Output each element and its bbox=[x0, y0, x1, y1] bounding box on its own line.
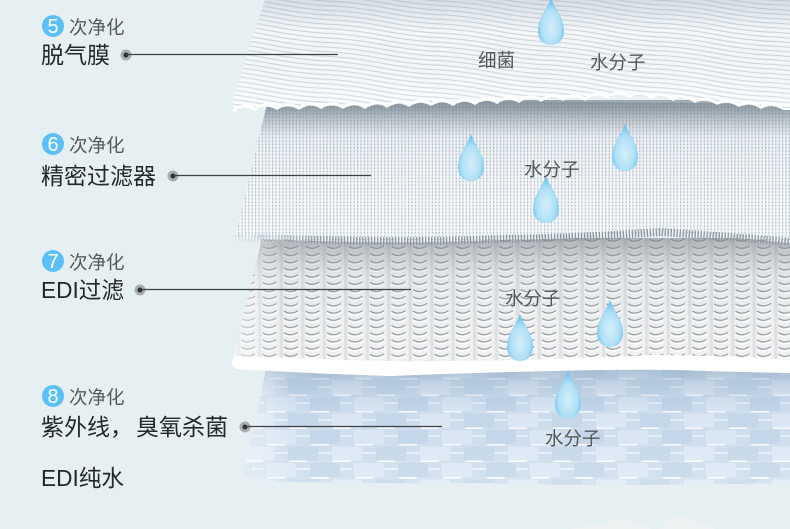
leader line 5 bbox=[120, 50, 338, 60]
molecule label: water, layer 4: 水分子 bbox=[545, 428, 601, 449]
step 8 label: 紫外线， bbox=[41, 414, 133, 440]
step 5 label: 脱气膜 bbox=[41, 42, 110, 68]
water drop 3 bbox=[612, 124, 638, 171]
molecule label: water, layer 1: 水分子 bbox=[590, 52, 646, 73]
water drop 7 bbox=[555, 371, 581, 418]
leader line 8 bbox=[240, 422, 442, 432]
step 6 label: 6 bbox=[47, 134, 59, 156]
layer 3: EDI chevron membrane bbox=[231, 238, 790, 376]
step 7 label bbox=[41, 250, 125, 303]
step 6 label bbox=[41, 133, 156, 189]
step 5 label: 次净化 bbox=[69, 17, 125, 38]
final product label: EDI纯水 bbox=[41, 465, 124, 491]
leader line 6 bbox=[168, 170, 371, 182]
step 7 label: 次净化 bbox=[69, 252, 125, 273]
water drop 5 bbox=[507, 314, 533, 361]
step 8 label bbox=[41, 385, 228, 440]
layer 1: degassing membrane bbox=[233, 0, 790, 113]
step 8 label: 8 bbox=[47, 386, 59, 408]
step 5 label: 5 bbox=[47, 16, 59, 38]
step 6 label: 次净化 bbox=[69, 135, 125, 156]
white edge band bbox=[232, 355, 790, 376]
water drop 1 bbox=[538, 0, 564, 45]
leader line 7 bbox=[134, 284, 411, 296]
molecule label: bacteria: 细菌 bbox=[478, 50, 515, 71]
step 7 label: 7 bbox=[47, 251, 59, 273]
scalloped white edge bbox=[233, 93, 783, 111]
water drop 2 bbox=[458, 134, 484, 181]
layer 4: woven blue membrane bbox=[242, 370, 790, 485]
water drop 6 bbox=[597, 300, 623, 347]
fringe bbox=[236, 232, 790, 242]
molecule label: water, layer 3: 水分子 bbox=[505, 288, 561, 309]
water drop 4 bbox=[533, 176, 559, 223]
step 8 label: 臭氧杀菌 bbox=[136, 414, 228, 440]
bottom faint flower decoration bbox=[568, 516, 716, 529]
step 6 label: 精密过滤器 bbox=[41, 163, 156, 189]
layer 2: precision filter mesh bbox=[235, 100, 790, 243]
step 5 label bbox=[41, 15, 125, 68]
step 7 label: EDI过滤 bbox=[41, 277, 124, 303]
step 8 label: 次净化 bbox=[69, 387, 125, 408]
molecule label: water, layer 2: 水分子 bbox=[524, 159, 580, 180]
